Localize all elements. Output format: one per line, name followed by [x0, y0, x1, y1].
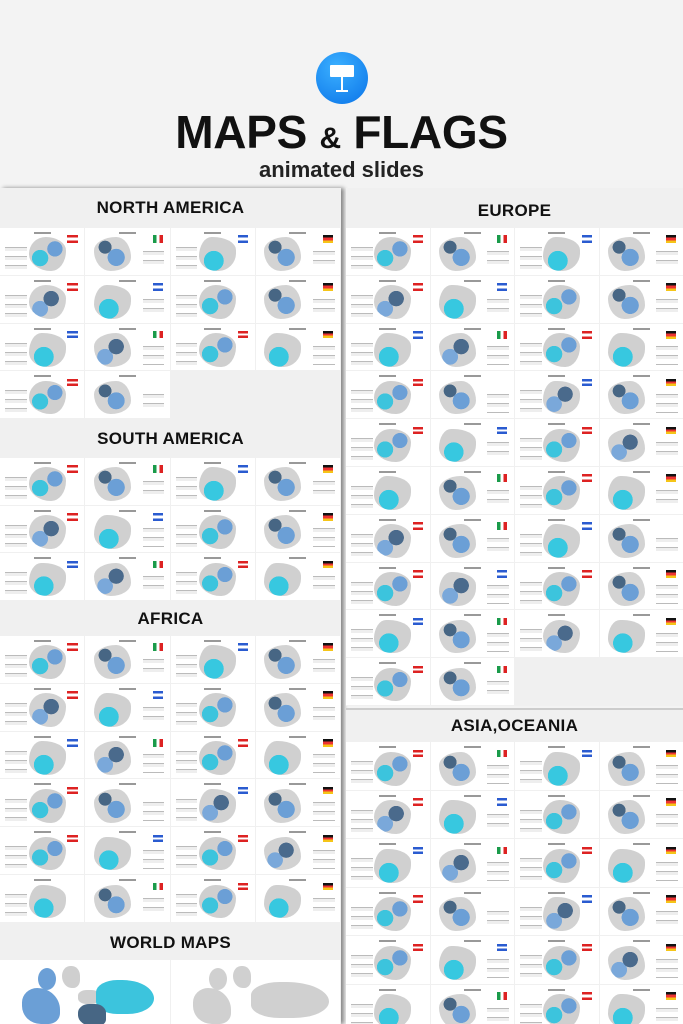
- world map: gray: [171, 960, 340, 1024]
- world map: colored: [0, 960, 170, 1024]
- icon: keynote: [316, 52, 368, 104]
- panel: left: [0, 188, 341, 1024]
- heading: south america: SOUTH AMERICA: [97, 429, 244, 448]
- panel: asia oceania: [346, 708, 683, 1024]
- heading: world maps: WORLD MAPS: [110, 933, 231, 952]
- grid: south america: [0, 458, 340, 600]
- subtitle: animated slides: [259, 157, 424, 182]
- grid: asia oceania: [346, 742, 683, 1024]
- title: MAPS & FLAGS: [175, 106, 508, 158]
- heading: north america: NORTH AMERICA: [97, 198, 244, 217]
- heading: africa: AFRICA: [137, 609, 204, 628]
- grid: europe: [346, 228, 683, 705]
- panel: europe: [346, 188, 683, 706]
- heading: europe: EUROPE: [478, 201, 551, 220]
- grid: africa: [0, 636, 340, 922]
- heading: asia oceania: ASIA,OCEANIA: [451, 716, 578, 735]
- grid: north america: [0, 228, 340, 418]
